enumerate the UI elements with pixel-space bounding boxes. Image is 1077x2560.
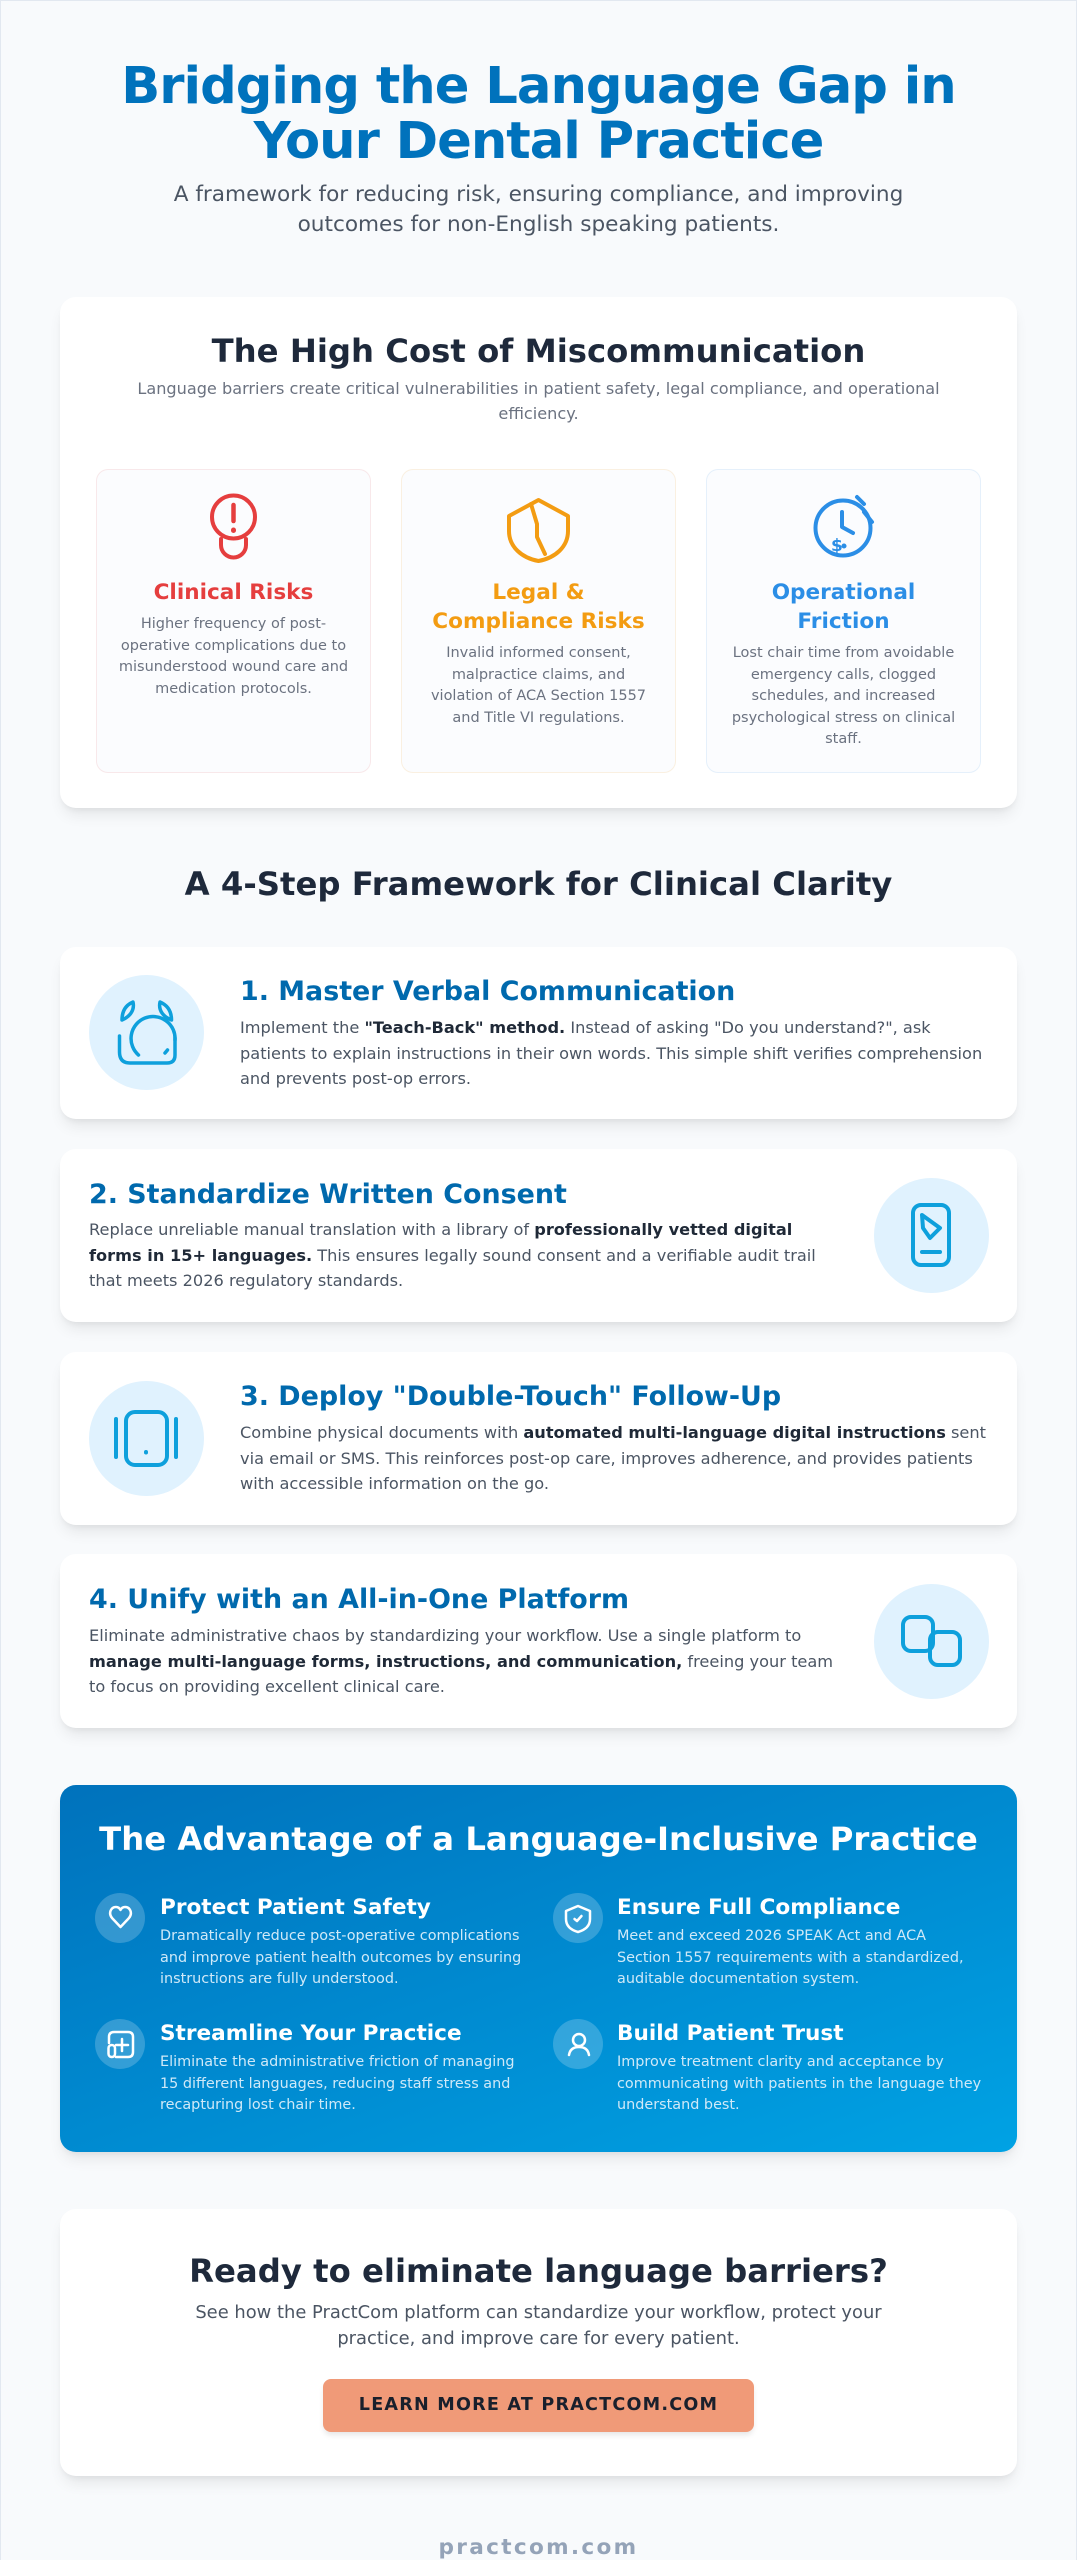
text: operational friction: staff. [825, 731, 862, 747]
text: operational friction [732, 645, 955, 747]
heading: 4-step framework: A 4-Step Framework for Clinical Clarity [185, 865, 892, 903]
text: protect patient safety: and improve patient health outcomes by ensuring [160, 1950, 521, 1966]
text: protect patient safety: instructions are fully understood. [160, 1971, 399, 1987]
text: protect patient safety: Dramatically reduce post-operative complications [160, 1928, 519, 1944]
text: step 3: via email or SMS. This reinforces post-op care, improves adherence, and provides patients [240, 1449, 973, 1468]
heading: step 2: 2. Standardize Written Consent [89, 1178, 567, 1210]
button: learn more: LEARN MORE AT PRACTCOM.COM [359, 2395, 718, 2415]
icon circle: safety [95, 1893, 145, 1943]
panel: step 2 [60, 1149, 1017, 1322]
heading: operational friction [772, 580, 915, 634]
icon circle: step 2 [874, 1178, 989, 1293]
title: Your Dental Practice [254, 111, 823, 171]
text: operational friction: Lost chair time from avoidable [733, 645, 954, 661]
heading: high cost: The High Cost of Miscommunication [212, 332, 865, 370]
icon circle: step 1 [89, 975, 204, 1090]
text: legal risks: and Title VI regulations. [452, 710, 625, 726]
text: legal risks: Invalid informed consent, [446, 645, 631, 661]
heading: advantages: The Advantage of a Language-Inclusive Practice [99, 1820, 978, 1858]
text: protect patient safety [160, 1928, 521, 1987]
footer: website: practcom.com [439, 2535, 638, 2560]
heading: build patient trust: Build Patient Trust [617, 2021, 844, 2046]
panel: advantages [60, 1785, 1017, 2152]
title: Bridging the Language Gap in [121, 56, 956, 116]
text: build patient trust [617, 2054, 981, 2113]
icon circle: step 4 [874, 1584, 989, 1699]
heading: protect patient safety: Protect Patient Safety [160, 1895, 431, 1920]
text: step 2 [89, 1220, 816, 1290]
text: step 2: forms in 15+ languages. This ensures legally sound consent and a verifiable audit trail [89, 1246, 816, 1265]
text: build patient trust: understand best. [617, 2097, 740, 2113]
icon circle: streamline [95, 2019, 145, 2069]
icon: stopwatch with dollar: $ [831, 536, 843, 556]
text: legal risks: malpractice claims, and [452, 667, 625, 683]
text: streamline your practice: recapturing lost chair time. [160, 2097, 356, 2113]
heading: step 3: 3. Deploy "Double-Touch" Follow-Up [240, 1381, 781, 1412]
text: legal risks [431, 645, 646, 726]
heading: clinical risks: Clinical Risks [154, 580, 313, 605]
text: call to action [195, 2302, 882, 2348]
heading: legal risks: Legal & [492, 580, 585, 605]
subtitle: A framework for reducing risk, ensuring compliance, and improving [174, 182, 903, 207]
heading: call to action: Ready to eliminate language barriers? [189, 2252, 888, 2290]
heading: step 1: 1. Master Verbal Communication [240, 976, 735, 1007]
text: step 4 [89, 1626, 833, 1696]
panel: step 1 [60, 947, 1017, 1119]
title [121, 56, 956, 171]
text: operational friction: schedules, and increased [752, 688, 935, 704]
text: clinical risks: misunderstood wound care and [119, 659, 348, 675]
text: ensure full compliance: auditable documentation system. [617, 1971, 859, 1987]
heading: streamline your practice: Streamline Your Practice [160, 2021, 462, 2046]
heading: step 4: 4. Unify with an All-in-One Platform [89, 1584, 629, 1615]
text: step 1: patients to explain instructions in their own words. This simple shift verifies comprehension [240, 1044, 982, 1063]
text: step 3 [240, 1423, 986, 1493]
text: step 1 [240, 1018, 982, 1088]
subtitle [174, 182, 903, 236]
text: build patient trust: communicating with patients in the language they [617, 2076, 981, 2092]
text: high cost intro: Language barriers create critical vulnerabilities in patient safety, legal compliance, and operational [137, 379, 940, 398]
icon circle: compliance [553, 1893, 603, 1943]
text: clinical risks: operative complications due to [121, 638, 346, 654]
panel: call to action [60, 2209, 1017, 2476]
button: learn more [323, 2379, 754, 2432]
text: high cost intro [137, 379, 940, 423]
text: high cost intro: efficiency. [498, 404, 579, 423]
icon circle: trust [553, 2019, 603, 2069]
text: step 4: Eliminate administrative chaos by standardizing your workflow. Use a single platform to [89, 1626, 801, 1645]
panel: step 4 [60, 1554, 1017, 1728]
subtitle: outcomes for non-English speaking patients. [298, 212, 779, 236]
text: operational friction: emergency calls, clogged [751, 667, 936, 683]
text: ensure full compliance [617, 1928, 964, 1987]
text: streamline your practice: 15 different languages, reducing staff stress and [160, 2076, 510, 2092]
text: step 3: with accessible information on the go. [240, 1474, 549, 1493]
text: clinical risks [119, 616, 348, 697]
text: clinical risks: medication protocols. [155, 681, 312, 697]
card: legal risks [401, 469, 676, 773]
text: operational friction: psychological stress on clinical [732, 710, 955, 726]
heading: legal risks: Compliance Risks [432, 609, 645, 634]
heading: operational friction: Operational [772, 580, 915, 605]
heading: legal risks [432, 580, 645, 634]
text: streamline your practice: Eliminate the administrative friction of managing [160, 2054, 514, 2070]
text: legal risks: violation of ACA Section 1557 [431, 688, 646, 704]
text: step 1: Implement the "Teach-Back" method. Instead of asking "Do you understand?", ask [240, 1018, 931, 1037]
heading: ensure full compliance: Ensure Full Compliance [617, 1895, 900, 1920]
panel: high cost of miscommunication [60, 297, 1017, 808]
text: build patient trust: Improve treatment clarity and acceptance by [617, 2054, 944, 2070]
text: ensure full compliance: Meet and exceed 2026 SPEAK Act and ACA [617, 1928, 926, 1944]
heading: operational friction: Friction [797, 609, 890, 634]
text: clinical risks: Higher frequency of post- [141, 616, 326, 632]
text: step 1: and prevents post-op errors. [240, 1069, 471, 1088]
icon circle: step 3 [89, 1381, 204, 1496]
text: step 2: Replace unreliable manual translation with a library of professionally vetted digital [89, 1220, 792, 1239]
card: operational friction [706, 469, 981, 773]
text: streamline your practice [160, 2054, 514, 2113]
text: step 4: to focus on providing excellent clinical care. [89, 1677, 445, 1696]
card: clinical risks [96, 469, 371, 773]
panel: step 3 [60, 1352, 1017, 1525]
text: ensure full compliance: Section 1557 requirements with a standardized, [617, 1950, 964, 1966]
text: step 4: manage multi-language forms, instructions, and communication, freeing your team [89, 1652, 833, 1671]
text: call to action: See how the PractCom platform can standardize your workflow, protect your [195, 2302, 882, 2323]
text: call to action: practice, and improve care for every patient. [337, 2328, 740, 2348]
text: step 3: Combine physical documents with automated multi-language digital instructions sent [240, 1423, 986, 1442]
text: step 2: that meets 2026 regulatory standards. [89, 1271, 403, 1290]
